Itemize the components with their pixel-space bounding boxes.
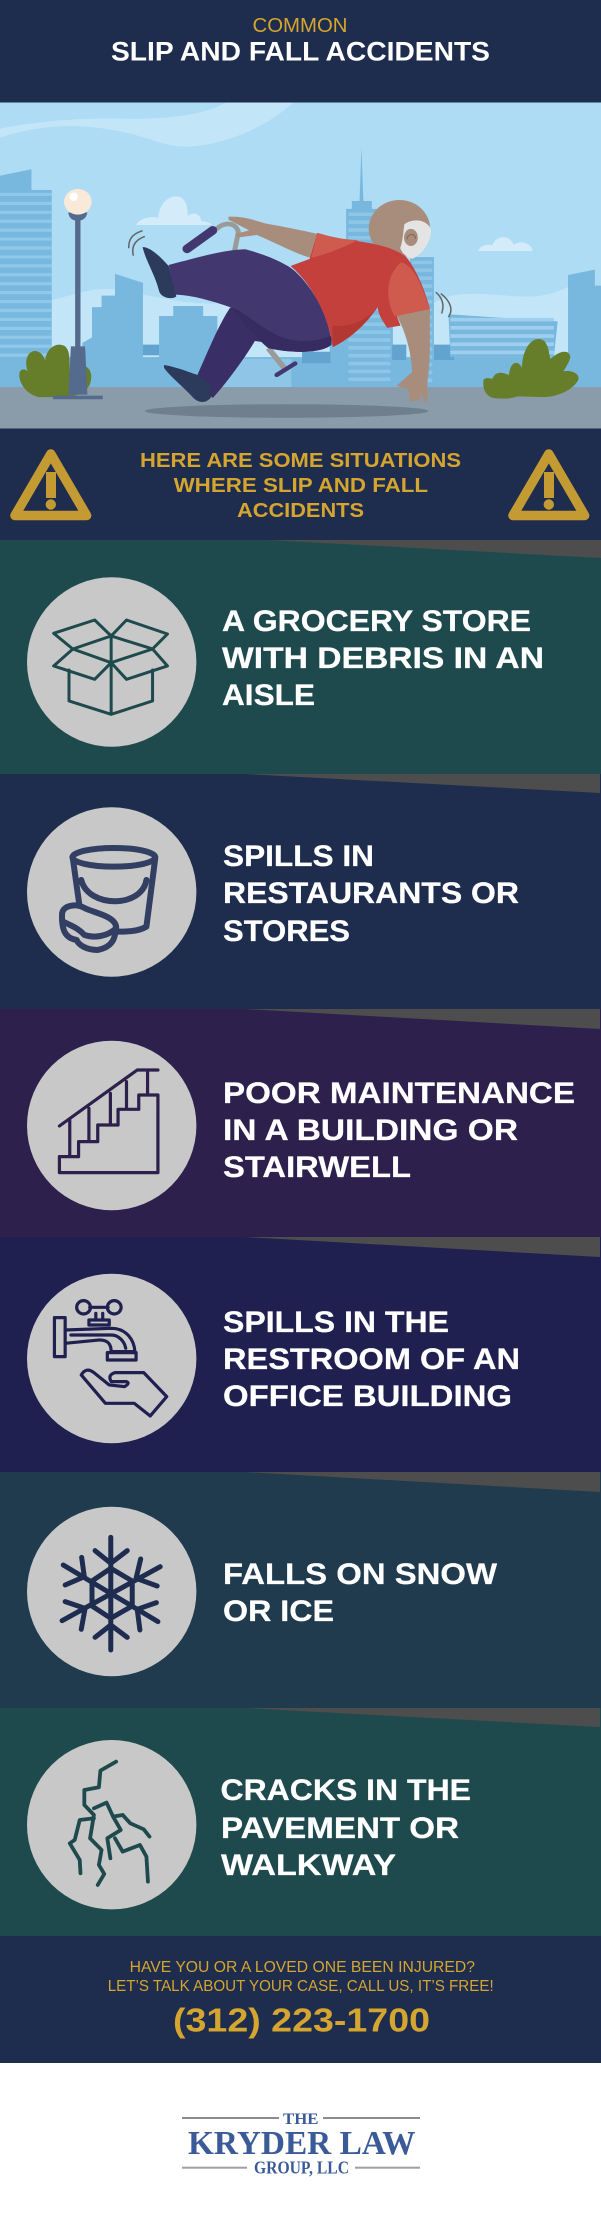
footer: call to action: HAVE YOU OR A LOVED ONE BEEN INJURED? — [130, 1959, 475, 1976]
icon: faucet and hand — [54, 1301, 167, 1416]
icon: crack — [70, 1762, 149, 1885]
panel: grocery store: AISLE — [222, 679, 315, 712]
panel: cracks in pavement: WALKWAY — [221, 1849, 396, 1882]
warning banner — [0, 428, 601, 540]
heading: situations: ACCIDENTS — [237, 499, 364, 522]
logo: Kryder Law Group: GROUP, LLC — [254, 2158, 349, 2178]
panel: falls on snow: FALLS ON SNOW — [223, 1558, 497, 1591]
panel: spills in the restroom: SPILLS IN THE — [223, 1306, 449, 1339]
bushes — [19, 345, 91, 397]
icon: warning triangle right — [513, 454, 585, 516]
panel: spills in the restroom: RESTROOM OF AN — [223, 1343, 520, 1376]
header: title: SLIP AND FALL ACCIDENTS — [111, 37, 490, 67]
panel: cracks in pavement: CRACKS IN THE — [220, 1774, 471, 1807]
panel: cracks in pavement: PAVEMENT OR — [221, 1812, 459, 1845]
heading: situations — [140, 449, 461, 522]
panel: poor maintenance: POOR MAINTENANCE — [223, 1077, 575, 1110]
panel: spills in restaurants — [0, 774, 601, 1009]
panel: grocery store: WITH DEBRIS IN AN — [222, 642, 544, 675]
logo: Kryder Law Group: THE — [283, 2111, 318, 2128]
footer: call to action — [0, 1936, 601, 2063]
panel: grocery store: A GROCERY STORE — [222, 605, 531, 638]
man falling — [129, 200, 451, 404]
panel: grocery store — [0, 540, 601, 774]
panel: falls on snow — [0, 1472, 601, 1708]
panel: falls on snow: OR ICE — [223, 1595, 334, 1628]
panel: poor maintenance — [0, 1009, 601, 1237]
heading: situations: HERE ARE SOME SITUATIONS — [140, 449, 461, 472]
logo: Kryder Law Group — [182, 2111, 420, 2178]
street lamp — [53, 189, 103, 399]
panel: spills in restaurants: SPILLS IN — [223, 840, 374, 873]
header: title: COMMON — [252, 15, 348, 37]
logo: Kryder Law Group: KRYDER LAW — [188, 2125, 416, 2162]
clouds — [136, 196, 212, 225]
ground — [0, 387, 601, 429]
illustration: man slipping in a city street — [0, 102, 601, 429]
panel: poor maintenance: STAIRWELL — [223, 1151, 411, 1184]
footer: call to action: (312) 223-1700 — [173, 2002, 430, 2039]
icon: warning triangle left — [15, 454, 87, 516]
heading: situations: WHERE SLIP AND FALL — [174, 474, 428, 497]
panel: spills in restaurants: STORES — [223, 915, 350, 948]
footer: call to action: LET’S TALK ABOUT YOUR CASE, CALL US, IT’S FREE! — [108, 1978, 494, 1995]
icon: bucket and rag — [62, 848, 155, 950]
panel: poor maintenance: IN A BUILDING OR — [223, 1114, 518, 1147]
panel: cracks in pavement — [0, 1708, 601, 1936]
header: title — [0, 0, 601, 103]
icon: open box — [54, 620, 168, 714]
panel: spills in restaurants: RESTAURANTS OR — [223, 877, 519, 910]
icon: stairs — [59, 1070, 158, 1173]
skyline — [0, 147, 601, 389]
panel: spills in the restroom: OFFICE BUILDING — [223, 1380, 512, 1413]
panel: spills in the restroom — [0, 1237, 601, 1472]
icon: snowflake — [62, 1537, 160, 1650]
